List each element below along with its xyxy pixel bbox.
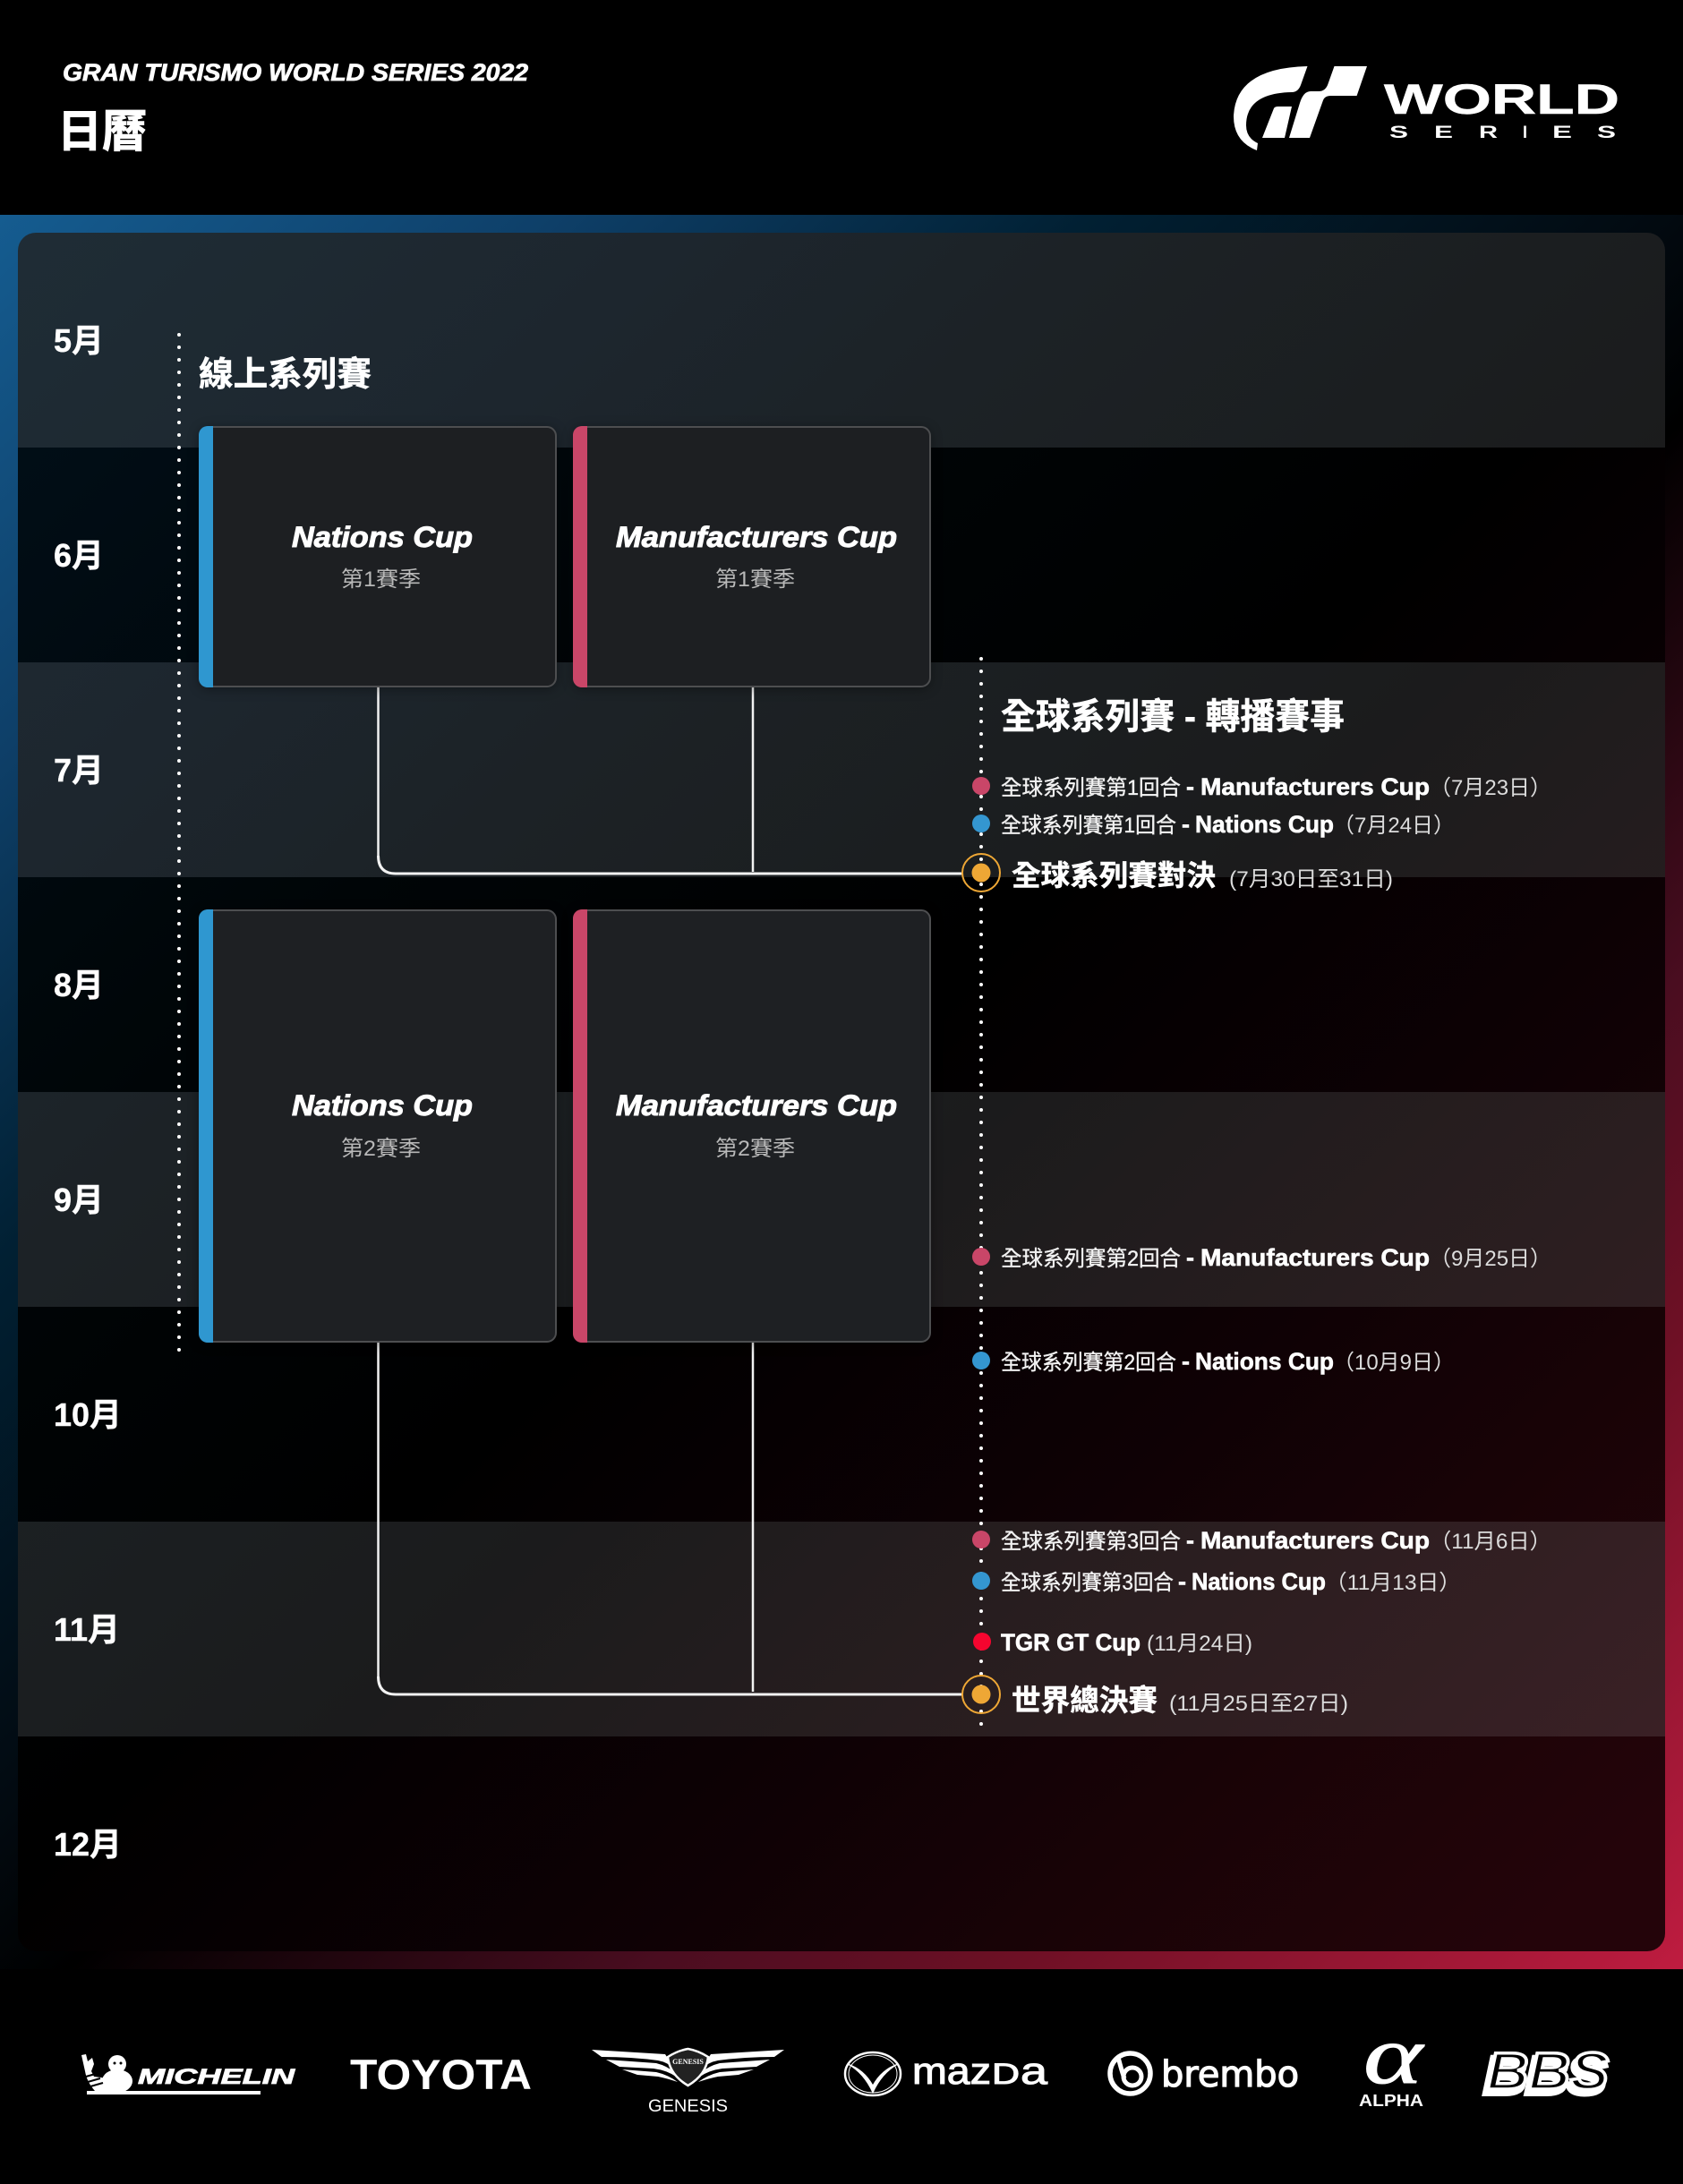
logo: BBS: BBS — [1484, 2047, 1606, 2105]
logo: Genesis: GENESIS — [648, 2097, 728, 2116]
event: round 1 Nations Cup: 全球系列賽第1回合 — [1001, 814, 1176, 838]
logo: Mazda — [845, 2050, 1048, 2095]
event: round 3 Nations Cup: - — [1178, 1568, 1186, 1595]
logo: Brembo: brembo — [1161, 2054, 1299, 2095]
world series timeline dotted line — [979, 659, 983, 1725]
event: round 3 Nations Cup: （11月13日） — [1325, 1571, 1461, 1595]
wordmark: SERIES: E — [1434, 124, 1453, 142]
event: TGR GT Cup — [973, 1629, 1252, 1656]
page heading: 日曆 — [57, 107, 147, 157]
card: Nations Cup season 1: Nations Cup — [292, 521, 473, 553]
event: round 1 Manufacturers Cup: 全球系列賽第1回合 — [1001, 776, 1181, 800]
series title: GRAN TURISMO WORLD SERIES 2022 — [63, 59, 528, 86]
event: round 1 Nations Cup: Nations Cup — [1195, 811, 1334, 838]
footer sponsor logos — [81, 2009, 1609, 2116]
event: round 1 Manufacturers Cup: - — [1186, 773, 1194, 800]
month labels: 7月 — [54, 752, 104, 789]
logo: BBS: BBS — [1487, 2043, 1609, 2101]
card: Manufacturers Cup season 2: Manufacturers Cup — [616, 1089, 897, 1122]
month labels: 5月 — [54, 322, 104, 359]
month labels: 6月 — [54, 537, 104, 574]
card: Manufacturers Cup season 2 — [573, 909, 930, 1343]
event: round 3 Manufacturers Cup: Manufacturers Cup — [1200, 1527, 1430, 1554]
icon: GT mark — [1234, 66, 1367, 150]
card: Nations Cup season 2: Nations Cup — [292, 1089, 473, 1122]
wordmark: SERIES — [1389, 124, 1616, 142]
logo: Mazda: D — [992, 2058, 1020, 2090]
event: round 2 Nations Cup: （10月9日） — [1333, 1351, 1455, 1375]
connector: season 2 to world final — [378, 1342, 963, 1694]
heading: world series live events: 全球系列賽 - 轉播賽事 — [1001, 697, 1345, 737]
card: Nations Cup season 2: 第2賽季 — [341, 1137, 421, 1161]
event: world final: 世界總決賽 — [1012, 1684, 1158, 1717]
event: round 3 Manufacturers Cup: （11月6日） — [1430, 1530, 1551, 1554]
month labels — [54, 322, 122, 1863]
event: TGR GT Cup: TGR GT Cup — [1001, 1629, 1141, 1656]
event: round 1 Nations Cup: - — [1182, 811, 1190, 838]
card: Nations Cup season 1 — [199, 426, 556, 687]
event: round 2 Nations Cup: Nations Cup — [1195, 1348, 1334, 1375]
card: Manufacturers Cup season 1: Manufacturers Cup — [616, 521, 897, 553]
logo: Alpha: ALPHA — [1359, 2092, 1423, 2110]
logo: Mazda: maz — [912, 2050, 991, 2092]
wordmark: SERIES: R — [1479, 124, 1498, 142]
wordmark: SERIES: S — [1597, 124, 1616, 142]
wordmark: SERIES: I — [1523, 124, 1527, 142]
month labels: 11月 — [54, 1611, 120, 1648]
event: round 1 Manufacturers Cup — [972, 773, 1551, 800]
event: round 2 Manufacturers Cup — [972, 1244, 1551, 1271]
logo: Genesis: GENESIS — [672, 2058, 704, 2066]
event: TGR GT Cup: (11月24日) — [1147, 1632, 1252, 1656]
month labels: 12月 — [54, 1826, 122, 1863]
card: Manufacturers Cup season 2: 第2賽季 — [715, 1137, 795, 1161]
event: world series showdown: 全球系列賽對決 — [1012, 859, 1216, 892]
event: round 3 Nations Cup: Nations Cup — [1192, 1568, 1326, 1595]
card: Nations Cup season 1: 第1賽季 — [341, 567, 421, 592]
event: round 2 Nations Cup: - — [1182, 1348, 1190, 1375]
month labels: 10月 — [54, 1396, 122, 1433]
card: Nations Cup season 2 — [199, 909, 556, 1343]
event: round 3 Manufacturers Cup: 全球系列賽第3回合 — [1001, 1530, 1181, 1554]
event: world series showdown: (7月30日至31日) — [1229, 867, 1393, 892]
month labels: 9月 — [54, 1182, 104, 1218]
connector: season 1 to showdown — [378, 687, 963, 874]
wordmark: SERIES: E — [1552, 124, 1572, 142]
heading: online series: 線上系列賽 — [199, 356, 372, 394]
month labels: 8月 — [54, 967, 104, 1003]
event: round 3 Manufacturers Cup — [972, 1527, 1551, 1554]
event: round 1 Nations Cup — [972, 811, 1455, 838]
logo: Genesis — [592, 2049, 784, 2116]
event: round 1 Manufacturers Cup: （7月23日） — [1430, 776, 1551, 800]
online series timeline dotted line — [177, 335, 181, 1351]
logo: Michelin: MICHELIN — [138, 2065, 295, 2089]
event: round 2 Manufacturers Cup: - — [1186, 1244, 1194, 1271]
event: world final — [962, 1676, 1348, 1717]
event: world series showdown — [962, 854, 1393, 892]
wordmark: WORLD: WORLD — [1384, 75, 1619, 123]
event: round 2 Manufacturers Cup: 全球系列賽第2回合 — [1001, 1247, 1181, 1271]
logo: Mazda: a — [1021, 2050, 1048, 2092]
event: round 2 Manufacturers Cup: （9月25日） — [1430, 1247, 1551, 1271]
event: round 3 Nations Cup — [972, 1568, 1461, 1595]
logo: Alpha — [1359, 2009, 1424, 2110]
panel: monthly calendar rows — [18, 233, 1665, 1951]
event: world final: (11月25日至27日) — [1169, 1692, 1348, 1716]
event: round 1 Nations Cup: （7月24日） — [1333, 814, 1455, 838]
event: round 2 Nations Cup — [972, 1348, 1455, 1375]
event: round 3 Manufacturers Cup: - — [1186, 1527, 1194, 1554]
event: round 2 Manufacturers Cup: Manufacturers Cup — [1200, 1244, 1430, 1271]
event: round 3 Nations Cup: 全球系列賽第3回合 — [1001, 1571, 1174, 1595]
card: Manufacturers Cup season 1 — [573, 426, 930, 687]
logo: Toyota: TOYOTA — [350, 2051, 532, 2098]
wordmark: SERIES: S — [1389, 124, 1408, 142]
logo: Michelin — [81, 2054, 295, 2094]
event: round 2 Nations Cup: 全球系列賽第2回合 — [1001, 1351, 1176, 1375]
logo: GT World Series — [1234, 66, 1619, 150]
card: Manufacturers Cup season 1: 第1賽季 — [715, 567, 795, 592]
logo: Alpha: α — [1363, 2009, 1424, 2101]
header — [57, 59, 1619, 157]
event: round 1 Manufacturers Cup: Manufacturers Cup — [1200, 773, 1430, 800]
